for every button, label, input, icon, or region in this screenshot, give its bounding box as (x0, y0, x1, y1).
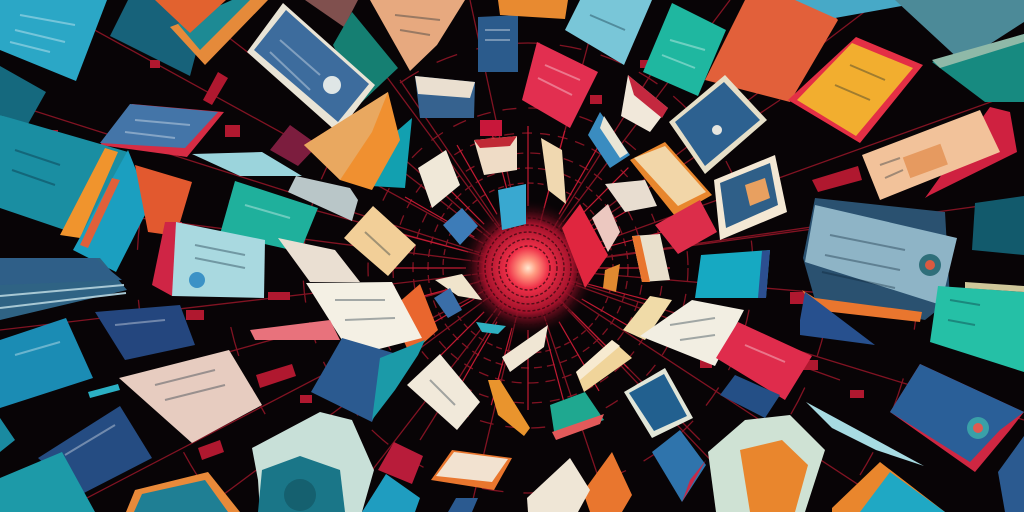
document: white and red slip (502, 325, 548, 372)
document: cream sliver (541, 138, 566, 204)
document: pale blue (565, 0, 652, 65)
document: orange and cyan corner (832, 462, 945, 512)
document: orange folder and cyan (304, 92, 412, 190)
document: pale grey strip (288, 176, 358, 221)
document: peach sheet (344, 206, 416, 276)
top-right documents (522, 0, 1024, 372)
document: red open book (562, 204, 620, 288)
document: small cyan slip (476, 322, 506, 334)
document: orange strip (498, 0, 568, 19)
document: blue open brochure (669, 75, 767, 174)
document: navy booklet (478, 15, 518, 72)
document: teal right edge (932, 34, 1024, 102)
document: orange large (705, 0, 838, 102)
document: bottom-left orange tent (126, 472, 240, 512)
top-left documents (0, 0, 652, 133)
document: beige (370, 0, 465, 71)
document: cyan booklet centre (498, 184, 526, 230)
document: green teal sheet (220, 181, 318, 252)
document: cyan sliver (88, 384, 120, 398)
document: mauve (305, 0, 358, 27)
document: cream sheet centre (418, 150, 460, 208)
document: blue framed sheet (624, 368, 693, 438)
document: bright teal sheet right (930, 282, 1024, 372)
document: small red and white box (474, 120, 517, 175)
document: small navy booklet (800, 292, 875, 345)
small red fragments (40, 60, 892, 460)
document: navy right of centre (720, 375, 780, 418)
document: light blue stack top (795, 0, 935, 18)
document: small white sheet (435, 274, 482, 300)
document: orange and teal stack (155, 0, 268, 65)
document: blue report with red edge (890, 364, 1024, 472)
dense red rays around the centre (386, 126, 670, 410)
document: teal folded (550, 392, 604, 440)
document: curved teal book (252, 412, 374, 512)
central glowing rings (460, 200, 596, 336)
centre documents (250, 76, 1024, 512)
document: navy box (311, 338, 425, 422)
document: dark teal far right (972, 196, 1024, 255)
document: navy lower left (38, 406, 152, 495)
document: cream open sheet lower centre (407, 354, 480, 430)
document: pale strip (192, 152, 302, 176)
document: blue report (247, 3, 375, 133)
document: small blue (443, 208, 478, 245)
document: small white folded (605, 180, 657, 212)
left documents (0, 66, 318, 512)
document: open white book (306, 282, 438, 356)
document: navy stacked books (0, 258, 127, 320)
document: cyan booklet (695, 250, 770, 298)
document: peach sheet centre (630, 142, 712, 216)
document: cream open book bottom (527, 458, 590, 512)
document: pale blue strip lower right (806, 402, 924, 466)
document: orange small report (632, 234, 670, 282)
document: navy sheet (95, 305, 195, 360)
document: peach report with red cover (862, 107, 1017, 200)
document: large grey-blue stack (802, 198, 957, 322)
document: dark teal (110, 0, 210, 76)
document: red-spined pale report (152, 222, 265, 298)
document: navy corner (998, 436, 1024, 512)
document: white folded (278, 238, 360, 282)
document: curved orange book (708, 415, 825, 512)
document: red small (378, 442, 423, 484)
document: blue folded (588, 112, 630, 168)
document: blue booklet with red spine (100, 104, 224, 157)
document: teal left strip (0, 66, 46, 124)
document: navy slip (434, 288, 462, 318)
document: red sheet mid right (655, 200, 717, 254)
document: small blue box (415, 76, 475, 118)
document: teal sheet (643, 3, 726, 96)
document: red sheet lower right (716, 322, 812, 400)
document: slate corner (895, 0, 1024, 62)
document: teal bottom left (0, 452, 95, 512)
document: large teal book (0, 115, 150, 272)
document: orange bottom (583, 452, 632, 512)
document: blue slip with red (652, 430, 706, 502)
document: orange behind (135, 165, 192, 236)
document: teal sliver (0, 418, 15, 452)
document: navy bottom (448, 498, 478, 512)
document: orange curved (488, 380, 530, 436)
document: cyan bottom (362, 474, 420, 512)
document: light blue top left (0, 0, 107, 81)
document: small orange (603, 264, 620, 292)
document: small cream and red booklet (621, 75, 668, 132)
document: dark teal upright (333, 12, 398, 102)
document: mauve small (270, 125, 318, 166)
document: white open sheets (623, 296, 744, 366)
document: pale pink sheet (119, 350, 262, 443)
document: red sheet (522, 42, 598, 128)
document: framed report (714, 155, 787, 240)
document: yellow sheet (788, 37, 923, 143)
document: pink strip (250, 320, 340, 340)
document: cream sheet with orange (431, 450, 512, 490)
document: open tan book (576, 340, 632, 392)
document: cyan sheet lower left (0, 318, 93, 408)
